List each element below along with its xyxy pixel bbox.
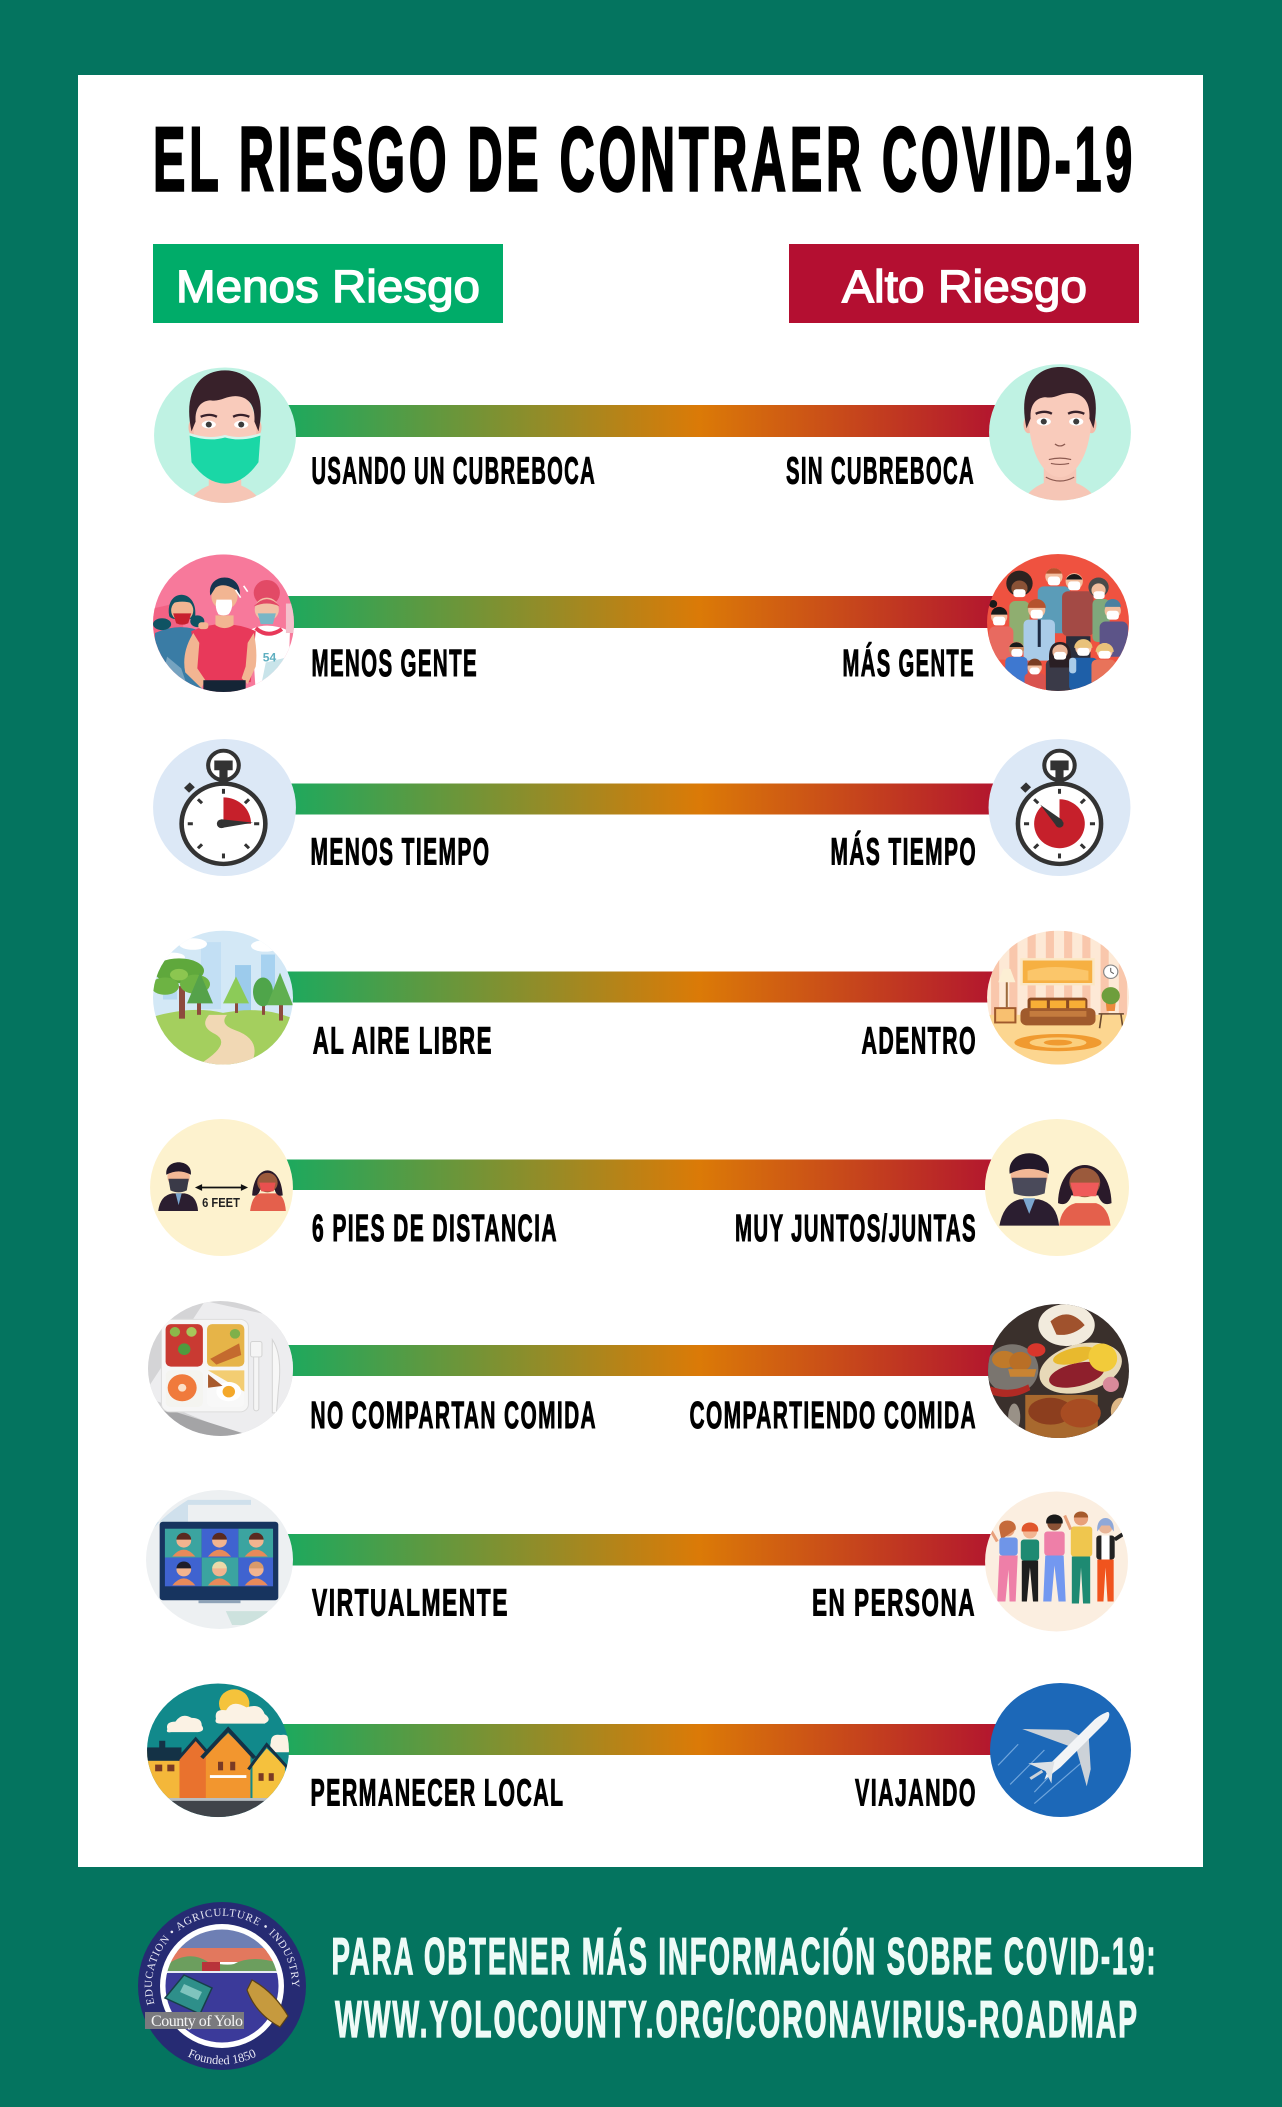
label: high risk: MÁS GENTE	[842, 641, 975, 685]
row 7: virtual vs in person	[146, 1490, 1128, 1632]
icon: two people six feet apart	[150, 1119, 293, 1256]
label: low risk: MENOS TIEMPO	[310, 832, 490, 874]
icon: indoor living room	[987, 931, 1129, 1065]
icon: person wearing a mask	[154, 367, 296, 503]
label: low risk: USANDO UN CUBREBOCA	[312, 450, 596, 492]
icon: crowded masked group	[987, 554, 1129, 693]
risk gradient bar	[285, 1534, 1000, 1566]
icon: stopwatch showing little time	[153, 739, 296, 876]
row 1: mask vs no mask	[154, 364, 1131, 503]
icon: local town	[147, 1684, 291, 1817]
icon: video call on a laptop	[146, 1490, 293, 1629]
label: low risk: 6 PIES DE DISTANCIA	[312, 1208, 558, 1250]
legend: lower risk: Menos Riesgo	[176, 261, 480, 312]
white main panel	[78, 75, 1203, 1867]
icon: stopwatch showing much time	[989, 739, 1130, 876]
risk gradient bar	[285, 1345, 1000, 1376]
label: high risk: ADENTRO	[862, 1020, 977, 1062]
label: high risk: SIN CUBREBOCA	[786, 450, 975, 492]
legend: high risk	[789, 244, 1139, 323]
seal boat	[247, 1980, 288, 2027]
risk gradient bar	[285, 1160, 1000, 1190]
seal motto: EDUCATION • AGRICULTURE • INDUSTRY	[144, 1908, 300, 2006]
risk gradient bar	[282, 1724, 1000, 1755]
label: low risk: PERMANECER LOCAL	[310, 1772, 564, 1814]
icon: shared feast	[986, 1304, 1131, 1443]
row 5: six feet apart vs close together	[150, 1119, 1129, 1256]
legend: high risk: Alto Riesgo	[842, 261, 1087, 312]
label: high risk: EN PERSONA	[812, 1582, 976, 1624]
label: low risk: AL AIRE LIBRE	[313, 1020, 493, 1062]
icon: group of people in person	[985, 1492, 1128, 1632]
label: low risk: MENOS GENTE	[312, 643, 478, 685]
label: low risk: VIRTUALMENTE	[312, 1582, 509, 1624]
label: high risk: COMPARTIENDO COMIDA	[690, 1395, 977, 1437]
label: high risk: MÁS TIEMPO	[830, 830, 977, 874]
legend: lower risk	[153, 244, 503, 323]
risk gradient bar	[285, 784, 1000, 814]
risk gradient bar	[285, 405, 1000, 437]
icon: person without a mask	[989, 364, 1131, 500]
icon: small masked group: 54	[263, 651, 277, 665]
icon: outdoor park	[151, 931, 293, 1065]
label: high risk: VIAJANDO	[855, 1772, 977, 1814]
label: low risk: NO COMPARTAN COMIDA	[310, 1395, 597, 1437]
icon: two people close together	[985, 1119, 1129, 1256]
icon: individual meal tray	[148, 1301, 293, 1436]
seal founding date: Founded 1850	[188, 2048, 256, 2064]
risk gradient bar	[285, 972, 1000, 1002]
seal book	[165, 1975, 212, 2014]
risk gradient bar	[285, 596, 1000, 628]
icon: two people six feet apart: 6 FEET	[202, 1195, 240, 1210]
row 2: fewer vs more people	[153, 554, 1129, 693]
crowd back row	[989, 568, 1128, 666]
row 8: staying local vs traveling	[147, 1683, 1131, 1817]
row 6: not sharing vs sharing food	[148, 1301, 1131, 1443]
row 4: outdoors vs indoors	[151, 931, 1129, 1065]
crowd front row	[1005, 599, 1116, 693]
row 3: less vs more time	[153, 739, 1130, 876]
seal name plate: County of Yolo	[151, 2013, 243, 2030]
footer text	[332, 1928, 1158, 2049]
icon: airplane	[990, 1683, 1131, 1817]
footer: county seal	[138, 1902, 306, 2070]
label: high risk: MUY JUNTOS/JUNTAS	[735, 1208, 977, 1250]
icon: small masked group	[153, 554, 294, 692]
